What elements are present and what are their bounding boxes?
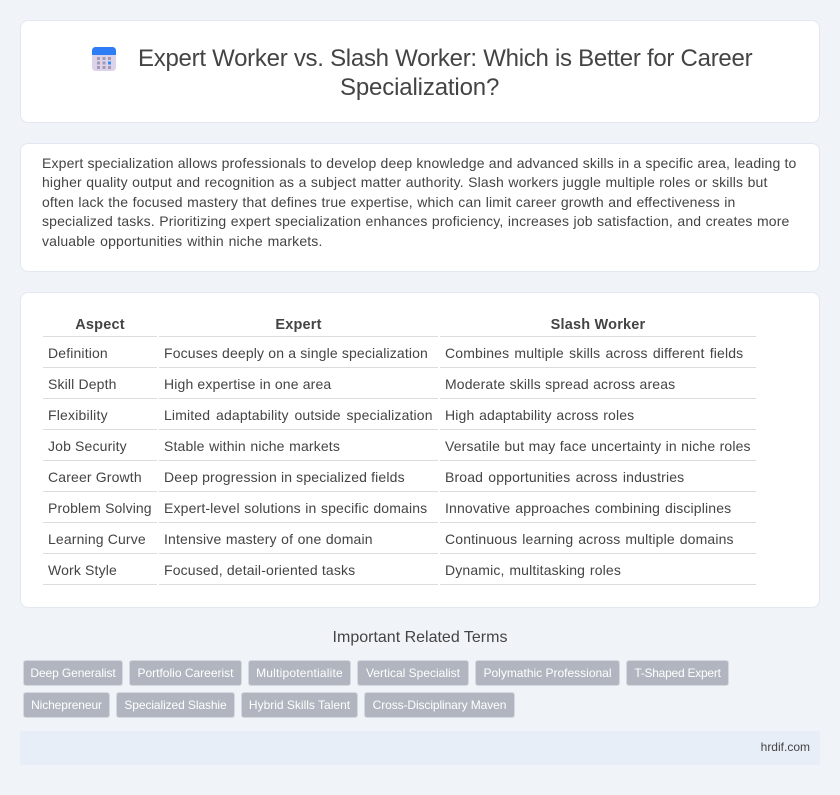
row: Learning Curve: [43, 531, 756, 554]
row: Work Style: Work Style: [48, 562, 117, 578]
row: Problem Solving: Expert-level solutions in specific domains: [164, 500, 427, 516]
title line 2: Specialization?: [340, 74, 499, 101]
tag: T-Shaped Expert: [634, 666, 721, 680]
tag: [248, 660, 351, 686]
description text: [42, 154, 796, 249]
row: Learning Curve: Learning Curve: [48, 531, 146, 547]
row: Work Style: [43, 562, 756, 585]
panel: comparison table: [20, 292, 820, 608]
title line 1: Expert Worker vs. Slash Worker: Which is Better for Career: [138, 45, 752, 72]
row: Job Security: Job Security: [48, 438, 127, 454]
row: Definition: Definition: [48, 345, 108, 361]
tag: [475, 660, 620, 686]
column headers: [43, 317, 756, 337]
tag: [357, 660, 469, 686]
tag: [23, 692, 110, 718]
row: Career Growth: Career Growth: [48, 469, 142, 485]
description text: Expert specialization allows professionals to develop deep knowledge and advanced skills in a specific area, leading to: [42, 154, 796, 170]
panel: title card: [20, 20, 820, 123]
row: Career Growth: Deep progression in specialized fields: [164, 469, 405, 485]
tag: Multipotentialite: [256, 666, 343, 680]
row: Definition: Focuses deeply on a single specialization: [164, 345, 428, 361]
icon: calendar: [92, 47, 116, 71]
row: Work Style: Focused, detail-oriented tasks: [164, 562, 355, 578]
row: Flexibility: [43, 407, 756, 430]
tag: Specialized Slashie: [124, 698, 227, 712]
row: Work Style: Dynamic, multitasking roles: [445, 562, 621, 578]
row: Job Security: Versatile but may face uncertainty in niche roles: [445, 438, 751, 454]
tag: Cross-Disciplinary Maven: [373, 698, 506, 712]
description text: higher quality output and recognition as a subject matter authority. Slash workers juggle multiple roles or skills but: [42, 174, 768, 190]
row: Learning Curve: Continuous learning across multiple domains: [445, 531, 734, 547]
row: Job Security: [43, 438, 756, 461]
description text: valuable opportunities within niche markets.: [42, 232, 322, 248]
row: Flexibility: High adaptability across roles: [445, 407, 634, 423]
column headers: Slash Worker: [551, 317, 645, 333]
row: Job Security: Stable within niche markets: [164, 438, 340, 454]
row: Skill Depth: [43, 376, 756, 399]
row: Problem Solving: [43, 500, 756, 523]
description text: often lack the focused mastery that defines true expertise, which can limit career growth and effectiveness in: [42, 194, 736, 210]
column headers: Aspect: [75, 317, 125, 333]
tag: [241, 692, 358, 718]
tag: Portfolio Careerist: [137, 666, 234, 680]
row: Definition: [43, 345, 756, 368]
tag list: [23, 660, 729, 718]
description text: specialized tasks. Prioritizing expert specialization enhances proficiency, increases job satisfaction, and creates more: [42, 213, 790, 229]
row: Definition: Combines multiple skills across different fields: [445, 345, 743, 361]
tag: [364, 692, 515, 718]
tag: Deep Generalist: [30, 666, 116, 680]
tag: [23, 660, 123, 686]
row: Career Growth: [43, 469, 756, 492]
column headers: Expert: [275, 317, 322, 333]
tag: Polymathic Professional: [483, 666, 612, 680]
row: Flexibility: Flexibility: [48, 407, 108, 423]
row: Career Growth: Broad opportunities across industries: [445, 469, 684, 485]
row: Skill Depth: High expertise in one area: [164, 376, 331, 392]
tag: Hybrid Skills Talent: [249, 698, 350, 712]
row: Learning Curve: Intensive mastery of one domain: [164, 531, 373, 547]
tag: [626, 660, 729, 686]
tag: Vertical Specialist: [366, 666, 460, 680]
row: Skill Depth: Skill Depth: [48, 376, 117, 392]
heading: related terms: Important Related Terms: [333, 629, 507, 646]
tag: Nichepreneur: [31, 698, 102, 712]
footer: hrdif.com: [761, 740, 810, 754]
tag: [129, 660, 242, 686]
panel: description: [20, 143, 820, 272]
row: Problem Solving: Innovative approaches combining disciplines: [445, 500, 731, 516]
row: Problem Solving: Problem Solving: [48, 500, 152, 516]
row: Flexibility: Limited adaptability outside specialization: [164, 407, 433, 423]
footer: [20, 731, 820, 765]
row: Skill Depth: Moderate skills spread across areas: [445, 376, 675, 392]
tag: [116, 692, 235, 718]
